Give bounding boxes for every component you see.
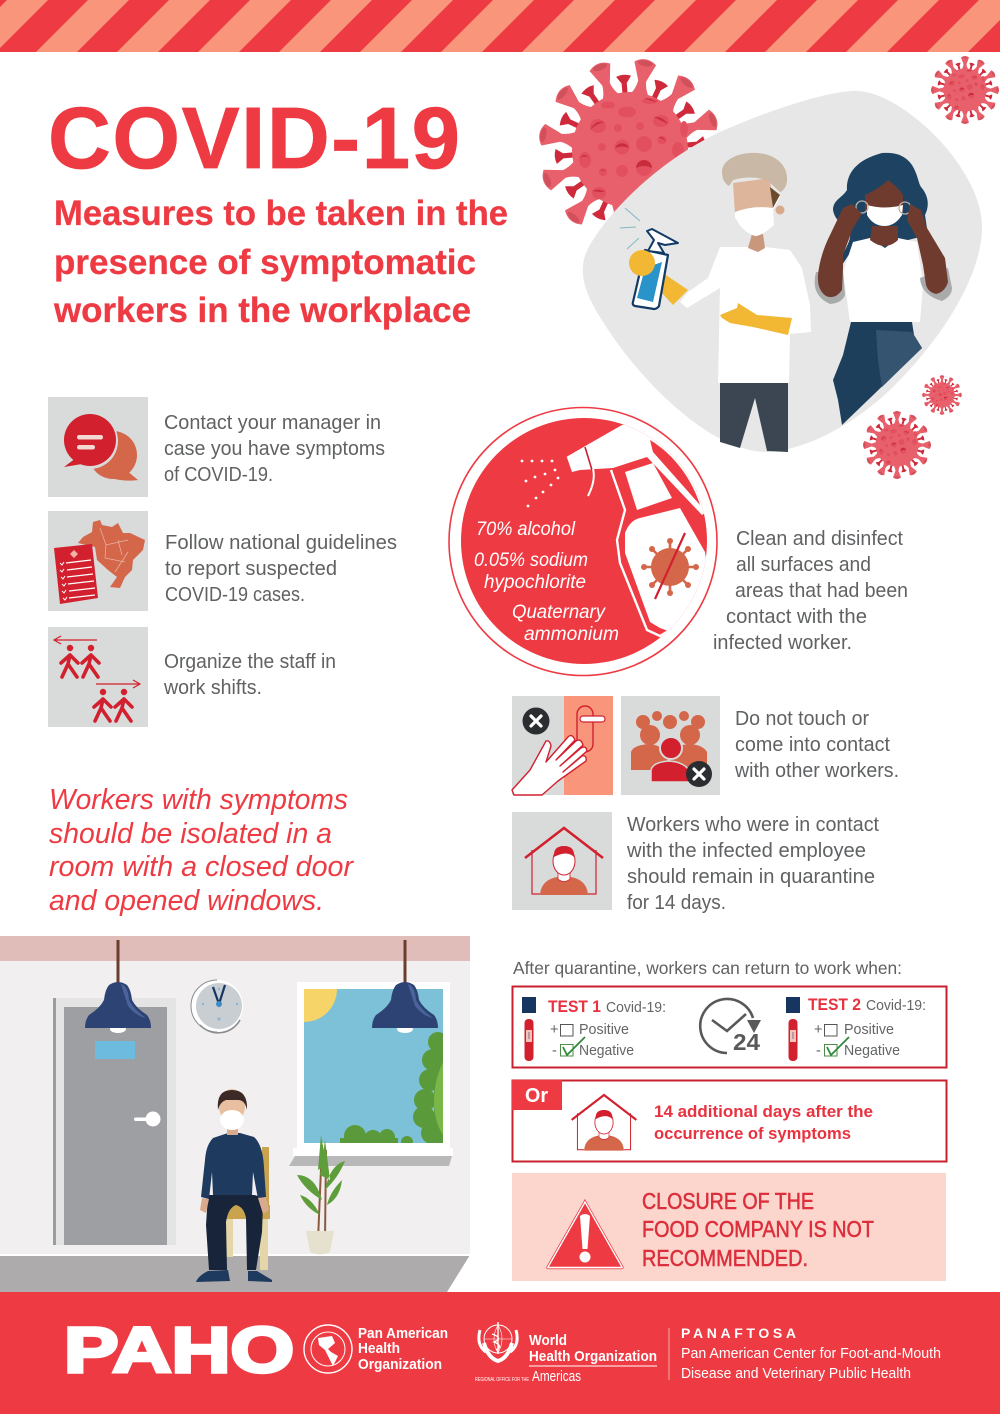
PANAFTOSA name: Disease and Veterinary Public Health — [681, 1365, 911, 1382]
text: national guidelines: to report suspected — [165, 557, 337, 580]
panel: or 14 additional days: 14 additional days after the — [654, 1102, 873, 1121]
clock — [191, 980, 243, 1033]
test 1 text: Covid-19: — [606, 1000, 666, 1016]
icon: tiny virus — [922, 375, 962, 415]
test 2 text: Positive — [844, 1022, 894, 1038]
text: contact manager: Contact your manager in — [164, 411, 381, 434]
PAHO wordmark: PAHO — [64, 1314, 294, 1386]
test 1 text: TEST 1 — [548, 997, 601, 1016]
disinfectant list: 70% alcohol — [476, 519, 576, 540]
text: clean and disinfect: areas that had been — [735, 579, 908, 602]
callout: isolate workers: and opened windows. — [49, 885, 324, 917]
PAHO name: Pan American — [358, 1325, 448, 1342]
WHO name: Health Organization — [529, 1348, 657, 1365]
window — [289, 982, 453, 1166]
PANAFTOSA name — [681, 1325, 941, 1382]
text: clean and disinfect: Clean and disinfect — [736, 527, 903, 550]
text: work shifts: Organize the staff in — [164, 650, 336, 673]
panel: or 14 additional days: Or — [525, 1085, 548, 1107]
text: clean and disinfect: all surfaces and — [736, 553, 871, 576]
WHO name: World — [529, 1332, 567, 1349]
text: contact manager: of COVID-19. — [164, 463, 273, 486]
illustration: isolation room — [0, 936, 470, 1292]
callout: isolate workers: Workers with symptoms — [49, 784, 348, 816]
room walls and floor — [0, 936, 470, 1292]
text: clean and disinfect: contact with the — [726, 605, 867, 628]
test 2 text: Negative — [844, 1043, 900, 1059]
subtitle: workers in the workplace — [53, 291, 471, 330]
text: do not touch: with other workers. — [734, 759, 899, 782]
PAHO seal — [304, 1325, 352, 1373]
text: quarantine: should remain in quarantine — [627, 865, 875, 888]
PANAFTOSA name: PANAFTOSA — [681, 1325, 796, 1341]
disinfectant list: ammonium — [524, 624, 619, 645]
test 2 text: Covid-19: — [866, 998, 926, 1014]
test 2 text: - — [816, 1043, 821, 1059]
disinfectant list: hypochlorite — [484, 572, 586, 593]
text: quarantine: with the infected employee — [626, 839, 866, 862]
text: return to work heading: After quarantine, workers can return to work when: — [513, 958, 902, 978]
seated person with mask — [196, 1089, 272, 1282]
text: national guidelines — [165, 531, 397, 606]
subtitle — [53, 194, 508, 330]
text: work shifts: work shifts. — [163, 676, 262, 699]
icon: small virus bottom — [863, 411, 931, 479]
door — [53, 998, 176, 1245]
panel: or 14 additional days: occurrence of symptoms — [654, 1124, 851, 1143]
disinfectant list: 0.05% sodium — [474, 550, 588, 571]
footer band — [0, 1292, 1000, 1414]
panel: contact manager icon — [48, 397, 148, 497]
virus crossed out — [641, 533, 699, 599]
panel: national guidelines icon — [48, 511, 148, 611]
panel: work shifts icon — [48, 627, 148, 727]
WHO name — [475, 1332, 657, 1385]
icon: large virus — [523, 43, 737, 257]
text: contact manager — [164, 411, 385, 486]
PAHO name — [358, 1325, 448, 1373]
callout: isolate workers: should be isolated in a — [49, 818, 332, 850]
spray bottle — [566, 424, 706, 638]
test 1 text: - — [552, 1043, 557, 1059]
icon: 24 hour clock: 24 — [733, 1029, 760, 1055]
test 2 text: + — [814, 1022, 822, 1038]
text: contact manager: case you have symptoms — [164, 437, 385, 460]
hanging lamps — [85, 940, 438, 1033]
text: do not touch: come into contact — [735, 733, 890, 756]
subtitle: Measures to be taken in the — [54, 194, 508, 233]
test 2 text — [808, 995, 926, 1059]
test 1 text — [548, 997, 666, 1059]
WHO name: Americas — [532, 1368, 581, 1385]
text: quarantine: for 14 days. — [627, 891, 726, 914]
disinfectant list — [474, 519, 619, 645]
icon: do not touch door — [512, 696, 613, 795]
spray droplets — [521, 460, 559, 507]
panel: closure warning: RECOMMENDED. — [642, 1245, 808, 1271]
text: quarantine: Workers who were in contact — [627, 813, 879, 836]
test 1 text: Positive — [579, 1022, 629, 1038]
illustration: woman adjusting mask — [815, 153, 952, 425]
icon: small virus top right — [931, 56, 999, 124]
test 1 text: Negative — [579, 1043, 634, 1059]
icon: no contact with workers — [621, 696, 720, 795]
PAHO name: Organization — [358, 1356, 442, 1373]
PAHO name: Health — [358, 1340, 400, 1357]
panel: closure warning: FOOD COMPANY IS NOT — [642, 1216, 874, 1242]
icon: 24 hour clock — [700, 999, 761, 1055]
text: clean and disinfect — [713, 527, 908, 654]
text: clean and disinfect: infected worker. — [713, 631, 852, 654]
PANAFTOSA name: Pan American Center for Foot-and-Mouth — [681, 1345, 941, 1362]
panel: closure warning: CLOSURE OF THE — [642, 1188, 814, 1214]
panel: two tests — [512, 986, 946, 1068]
top striped band — [0, 0, 1000, 52]
disinfectant list: Quaternary — [512, 602, 606, 623]
text: national guidelines: Follow national guidelines — [165, 531, 397, 554]
icon: quarantine house — [512, 812, 612, 910]
panel: or 14 additional days — [512, 1080, 946, 1162]
text: do not touch — [734, 707, 899, 782]
title: COVID-19 — [48, 90, 462, 187]
text: national guidelines: COVID-19 cases. — [165, 583, 305, 606]
text: work shifts — [163, 650, 336, 699]
callout: isolate workers: room with a closed door — [49, 851, 354, 883]
callout: isolate workers — [49, 784, 354, 917]
text: do not touch: Do not touch or — [735, 707, 869, 730]
test 2 text: TEST 2 — [808, 995, 861, 1014]
panel: closure warning — [512, 1173, 946, 1281]
red disc — [461, 418, 707, 664]
icon: test tube 2 — [786, 997, 800, 1061]
icon: test tube 1 — [522, 997, 536, 1061]
text: quarantine — [626, 813, 879, 914]
disinfectant circle — [449, 408, 725, 676]
test 1 text: + — [550, 1022, 558, 1038]
grey blob background — [583, 91, 982, 452]
illustration: worker with spray bottle — [620, 153, 811, 452]
WHO name: REGIONAL OFFICE FOR THE — [475, 1377, 529, 1383]
plant — [297, 1135, 345, 1254]
subtitle: presence of symptomatic — [54, 243, 476, 282]
WHO emblem — [479, 1322, 517, 1361]
